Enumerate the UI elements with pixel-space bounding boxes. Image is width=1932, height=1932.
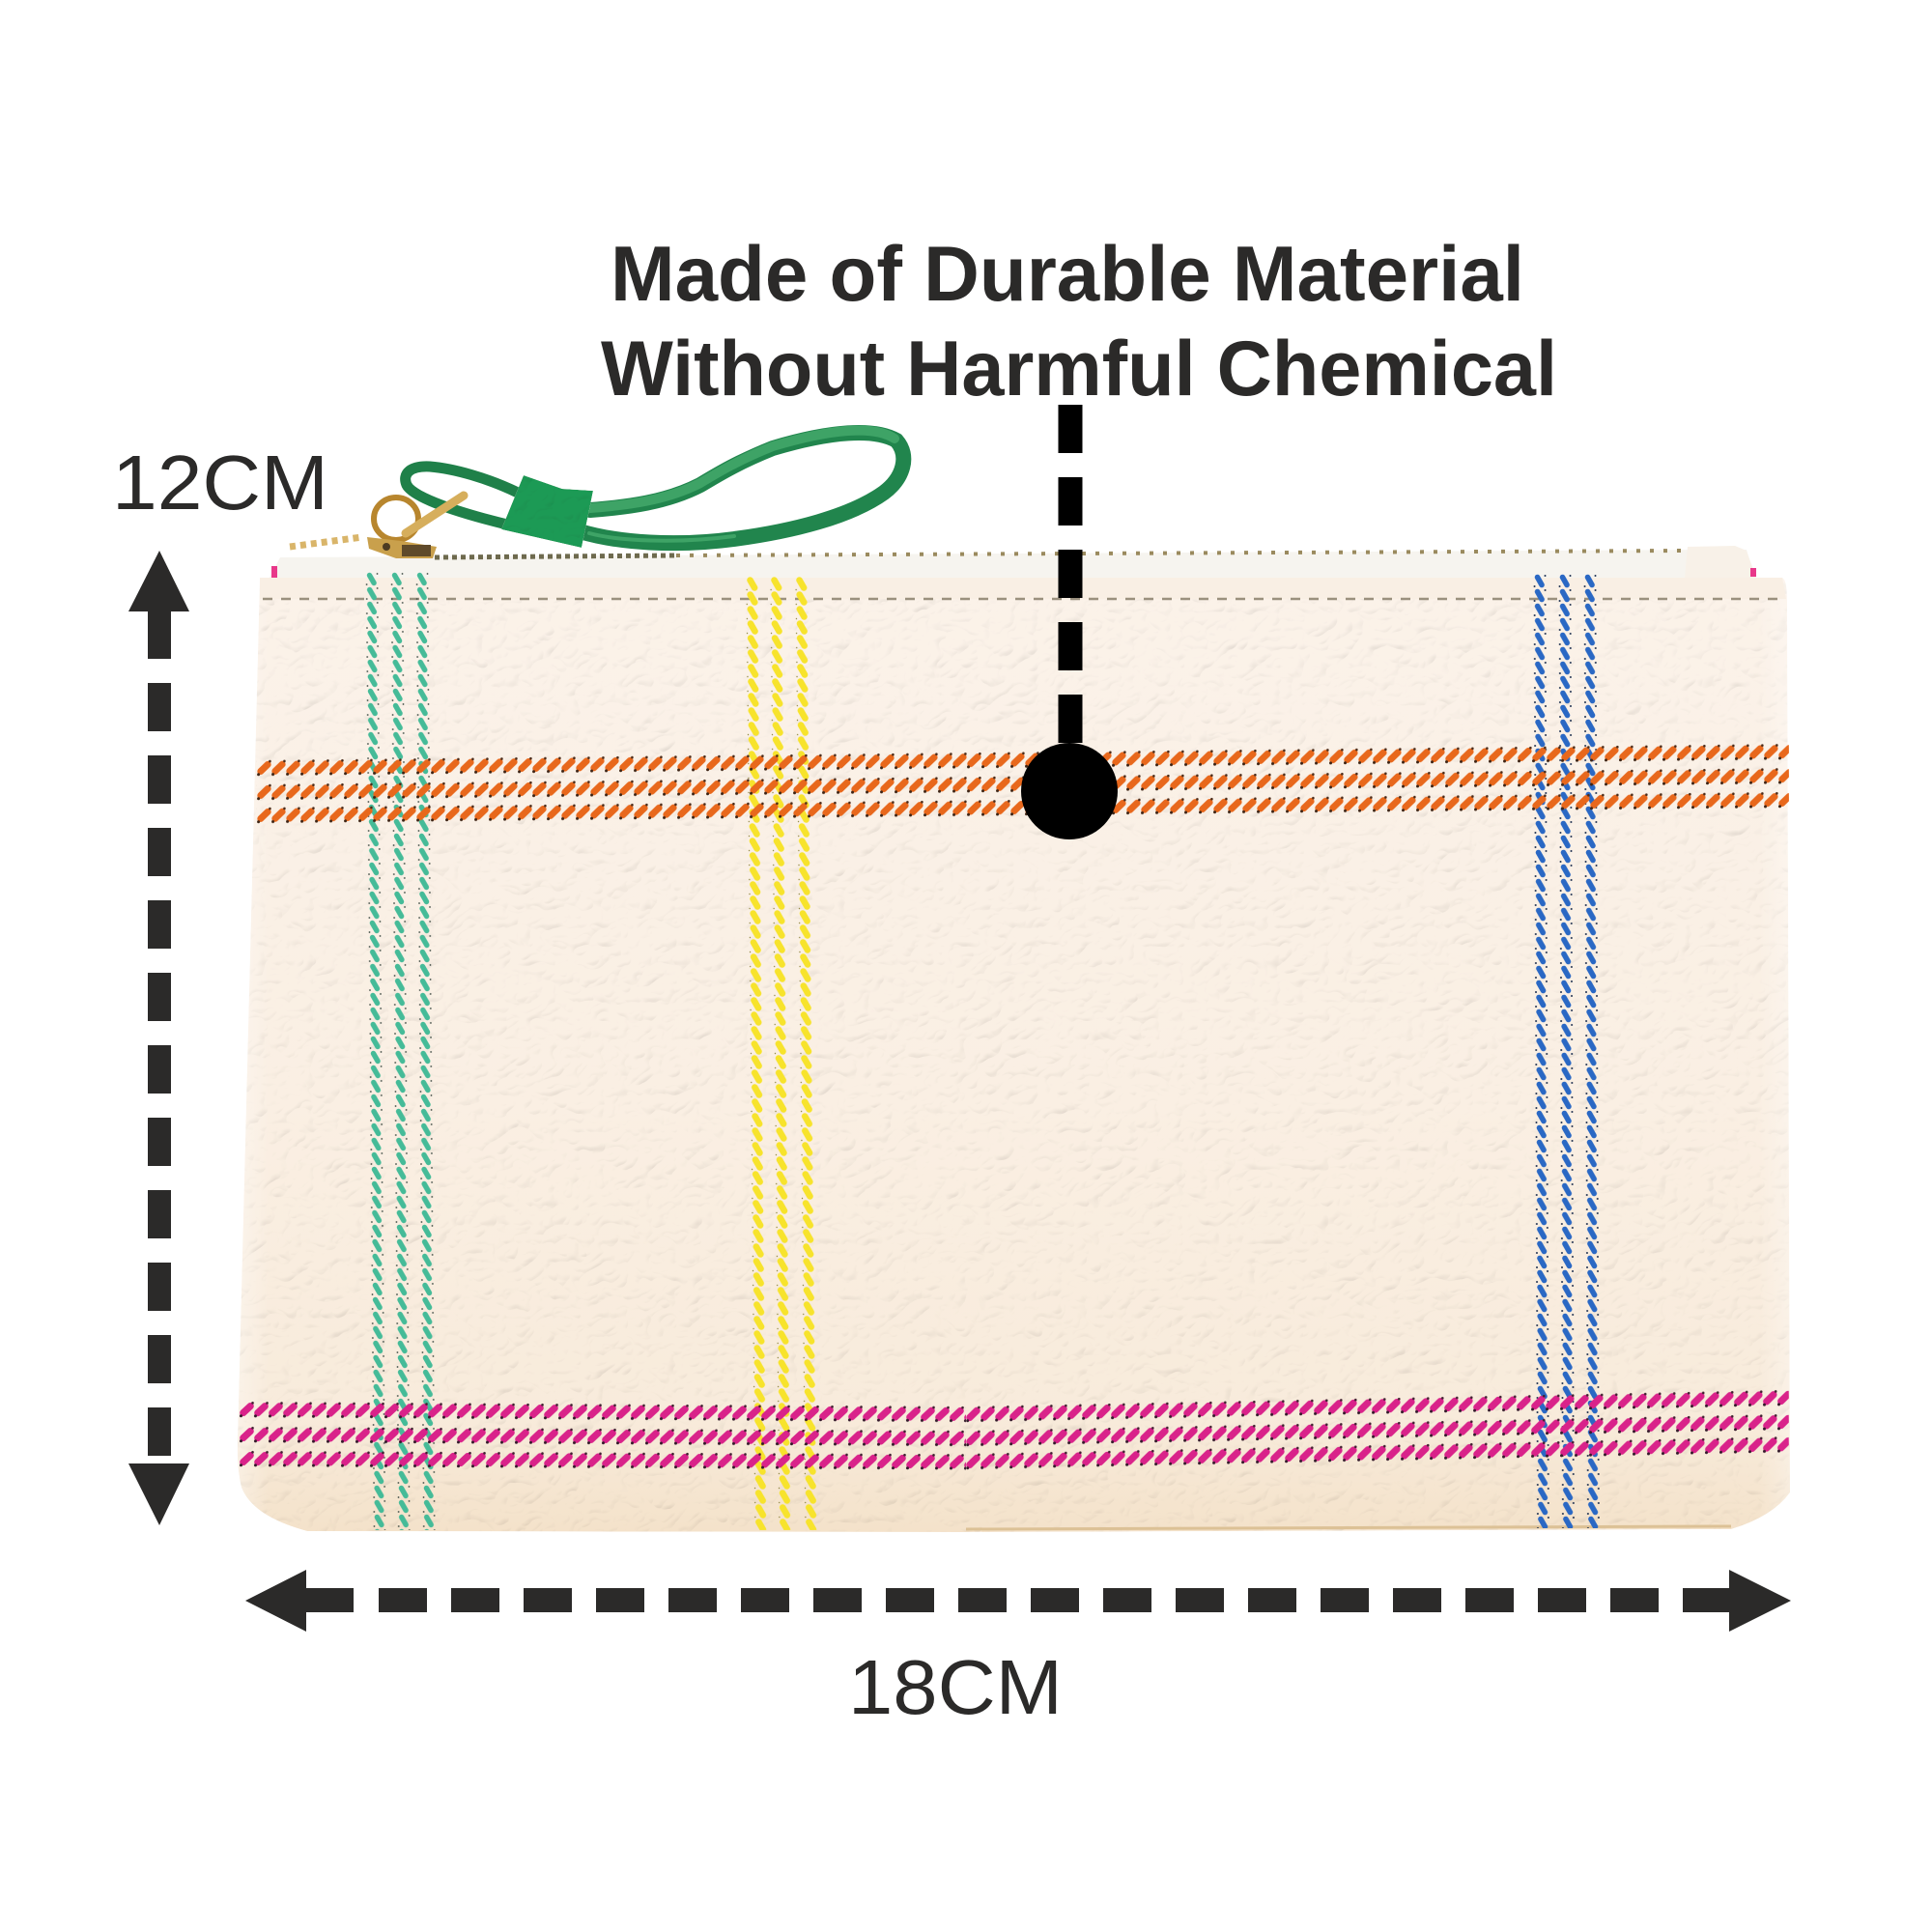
seam stitching xyxy=(263,598,1783,600)
width label: 18CM xyxy=(848,1644,1063,1730)
leather body xyxy=(238,578,1790,1532)
gold zipper hardware xyxy=(367,496,464,558)
height arrow xyxy=(128,551,189,1525)
callout heading: Made of Durable Material xyxy=(611,231,1524,318)
zipper tape xyxy=(270,550,1754,578)
pin line from callout to pouch xyxy=(1021,405,1118,839)
green stitching xyxy=(364,572,437,1530)
pink lining peeking at the corners xyxy=(271,566,1756,578)
callout heading: Without Harmful Chemical xyxy=(601,326,1557,412)
zipper end tab xyxy=(1685,546,1756,578)
height label: 12CM xyxy=(112,440,328,526)
yellow stitching xyxy=(745,577,819,1530)
callout heading xyxy=(601,231,1557,412)
strap keeper xyxy=(501,475,593,548)
zipper teeth xyxy=(290,537,1686,557)
top band xyxy=(260,578,1786,599)
green zipper pull strap xyxy=(406,431,903,543)
width arrow xyxy=(245,1570,1791,1632)
orange stitching xyxy=(257,743,1789,824)
pouch xyxy=(238,431,1790,1532)
blue stitching xyxy=(1532,574,1601,1528)
bottom edge line xyxy=(966,1526,1731,1529)
side highlight xyxy=(238,578,1790,1532)
pink stitching xyxy=(240,1389,1789,1470)
